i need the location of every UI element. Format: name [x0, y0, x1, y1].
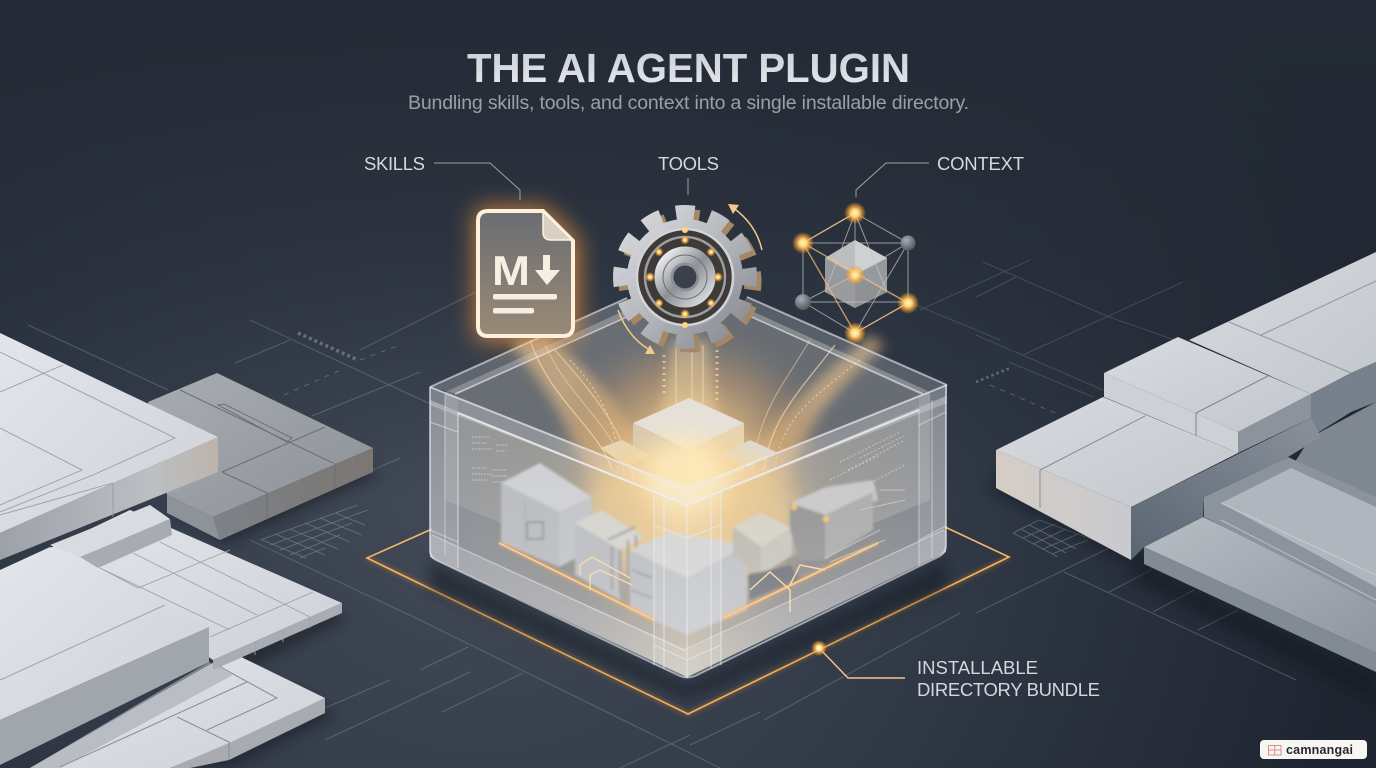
long back slab — [1189, 252, 1376, 437]
callout: installable directory bundle — [811, 640, 1100, 700]
wall code left — [472, 437, 508, 482]
left front wall — [430, 400, 687, 677]
inner right slab — [1204, 457, 1376, 604]
label: tools: TOOLS — [658, 153, 719, 174]
subtitle: Bundling skills, tools, and context into a single installable directory. — [408, 92, 969, 114]
gear lights — [645, 227, 723, 328]
document glow — [476, 208, 578, 340]
golden fan left — [510, 335, 650, 480]
middle thin slab — [50, 510, 342, 670]
central glow — [540, 320, 840, 620]
interior core glow — [580, 445, 800, 585]
left slabs — [0, 333, 380, 768]
document body — [478, 211, 573, 336]
markdown m: M — [492, 247, 530, 294]
gear rings — [637, 229, 733, 325]
big lower slab — [0, 547, 209, 765]
wall code right — [830, 432, 905, 490]
light streams — [530, 340, 860, 480]
callout: installable directory bundle: INSTALLABLE — [917, 657, 1038, 678]
frost overlay — [430, 396, 946, 677]
box ground shadow — [430, 560, 946, 700]
label: context — [856, 153, 1024, 197]
document fold — [543, 212, 572, 240]
raised bar — [50, 505, 172, 568]
rotation arrow bottom — [618, 310, 655, 354]
footprint outline — [367, 527, 1009, 714]
polyhedron core — [825, 240, 887, 308]
golden fan right — [730, 335, 885, 480]
slab b — [996, 397, 1321, 560]
interior components — [501, 463, 878, 635]
back cube — [633, 398, 744, 490]
label: tools — [658, 153, 719, 195]
icon: context polyhedron — [792, 202, 919, 344]
slab shadow right — [990, 470, 1376, 700]
polyhedron nodes — [792, 202, 919, 344]
watermark badge — [1260, 740, 1367, 759]
document lines — [493, 294, 557, 314]
floor grid lines — [28, 260, 1296, 768]
icon: markdown document — [476, 208, 578, 340]
big top slab — [0, 333, 218, 560]
rear dark slab — [1291, 402, 1376, 510]
glowing floor traces — [499, 490, 905, 620]
block a — [1104, 337, 1311, 453]
right slabs — [990, 252, 1376, 700]
icon: book — [1268, 746, 1281, 755]
footprint glow — [367, 557, 1009, 714]
floor dashes and grid patches — [260, 333, 1094, 558]
right cube — [790, 480, 878, 560]
bottom slab — [30, 653, 325, 768]
cube one — [501, 463, 592, 567]
cube three — [630, 532, 747, 635]
slab shadow left — [170, 460, 380, 768]
center stream beam — [650, 340, 725, 490]
top corner glow — [645, 437, 725, 513]
right small cube — [733, 513, 792, 575]
polyhedron edges — [803, 213, 908, 333]
dark base module — [748, 565, 800, 600]
label: context: CONTEXT — [937, 153, 1024, 174]
box frame — [430, 297, 947, 678]
label: skills: SKILLS — [364, 153, 425, 174]
lower right slab — [1144, 517, 1376, 672]
callout: installable directory bundle: DIRECTORY BUNDLE — [917, 679, 1100, 700]
plugin box — [430, 282, 947, 700]
right front wall — [687, 396, 946, 677]
cube two server — [575, 510, 644, 600]
polyhedron glowing edges — [803, 213, 908, 333]
watermark badge: camnangai — [1286, 743, 1353, 757]
gray slab — [148, 373, 373, 540]
box back walls — [445, 282, 930, 600]
gear disc — [627, 219, 743, 335]
gear teeth — [622, 214, 748, 340]
glass rims — [430, 297, 947, 678]
rotation arrow top — [728, 204, 762, 250]
icon: gear — [618, 204, 762, 354]
gear shadow edge — [627, 218, 753, 344]
markdown arrow — [535, 255, 560, 285]
title: THE AI AGENT PLUGIN — [467, 45, 910, 91]
rear small blocks — [600, 440, 776, 467]
label: skills — [364, 153, 520, 200]
